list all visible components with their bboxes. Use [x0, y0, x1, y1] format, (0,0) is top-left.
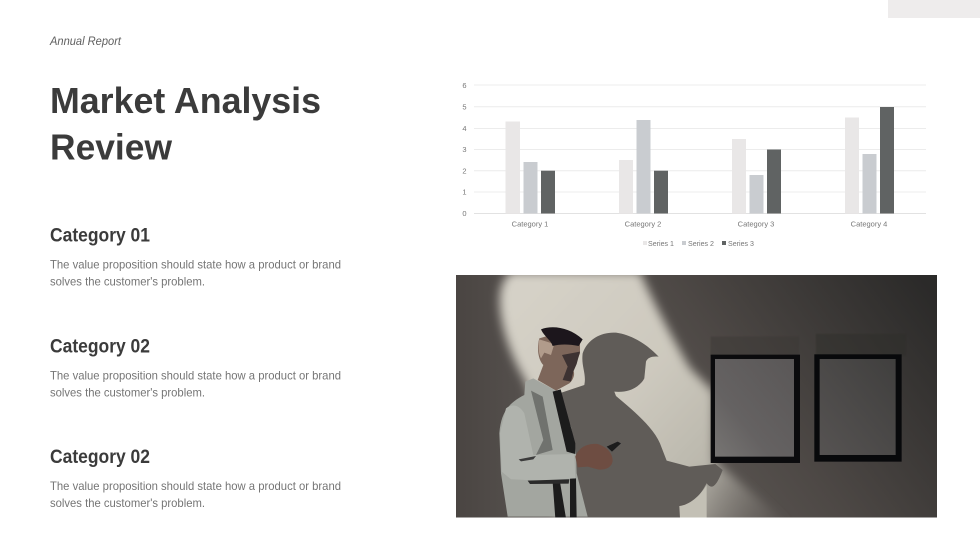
picture frames — [711, 334, 906, 463]
hand — [575, 444, 613, 470]
title: Market Analysis — [50, 80, 321, 121]
series 2 bars — [524, 120, 876, 214]
photo: man with phone and two frames — [456, 272, 937, 525]
text block: category 02 repeated: solves the customer's problem. — [50, 496, 205, 510]
series 3 bars — [541, 107, 894, 214]
y axis labels: 6 — [462, 81, 467, 90]
phone — [607, 442, 621, 452]
text block: category 02 repeated: The value proposition should state how a product or brand — [50, 479, 341, 493]
chest fold shadow — [531, 391, 553, 455]
text block: category 01: The value proposition should state how a product or brand — [50, 258, 341, 272]
man figure — [499, 327, 621, 518]
sleeve creases — [519, 456, 536, 461]
y axis labels: 3 — [462, 145, 467, 154]
legend — [643, 239, 754, 248]
corner tab — [888, 0, 980, 18]
hair — [541, 327, 583, 346]
y axis labels: 1 — [462, 188, 467, 196]
text block: category 01 — [50, 226, 341, 288]
forearm sleeve — [500, 406, 575, 481]
text block: category 02 — [50, 336, 341, 400]
y axis labels — [462, 81, 467, 218]
text block: category 02: solves the customer's problem. — [50, 386, 205, 400]
wall light patch — [500, 272, 790, 525]
y axis labels: 2 — [462, 166, 467, 176]
man's shadow — [556, 333, 723, 523]
category labels — [512, 220, 887, 228]
series 1 bars — [506, 118, 859, 214]
category labels: Category 3 — [738, 220, 774, 228]
text block: category 02: Category 02 — [50, 336, 150, 358]
text block: category 01: solves the customer's problem. — [50, 274, 205, 288]
bar chart — [462, 81, 926, 248]
dark undershirt — [553, 389, 575, 454]
legend: Series 3 — [728, 239, 754, 248]
y axis labels: 5 — [462, 102, 467, 112]
neck and face — [538, 333, 580, 391]
category labels: Category 1 — [512, 220, 548, 228]
light blob under the hand shadow — [679, 485, 707, 518]
eyebrow: Annual Report: Annual Report — [49, 36, 122, 48]
category labels: Category 2 — [625, 220, 661, 228]
legend: Series 2 — [688, 239, 714, 248]
text block: category 01: Category 01 — [50, 226, 150, 246]
title: Review — [50, 126, 173, 168]
y axis labels: 4 — [462, 124, 467, 133]
text block: category 02: The value proposition should state how a product or brand — [50, 368, 341, 382]
y axis labels: 0 — [462, 209, 467, 218]
text block: category 02 repeated — [50, 447, 341, 510]
title — [50, 80, 321, 168]
shirt — [499, 378, 588, 517]
category labels: Category 4 — [851, 220, 887, 228]
legend: Series 1 — [648, 239, 674, 248]
text block: category 02 repeated: Category 02 — [50, 447, 150, 468]
